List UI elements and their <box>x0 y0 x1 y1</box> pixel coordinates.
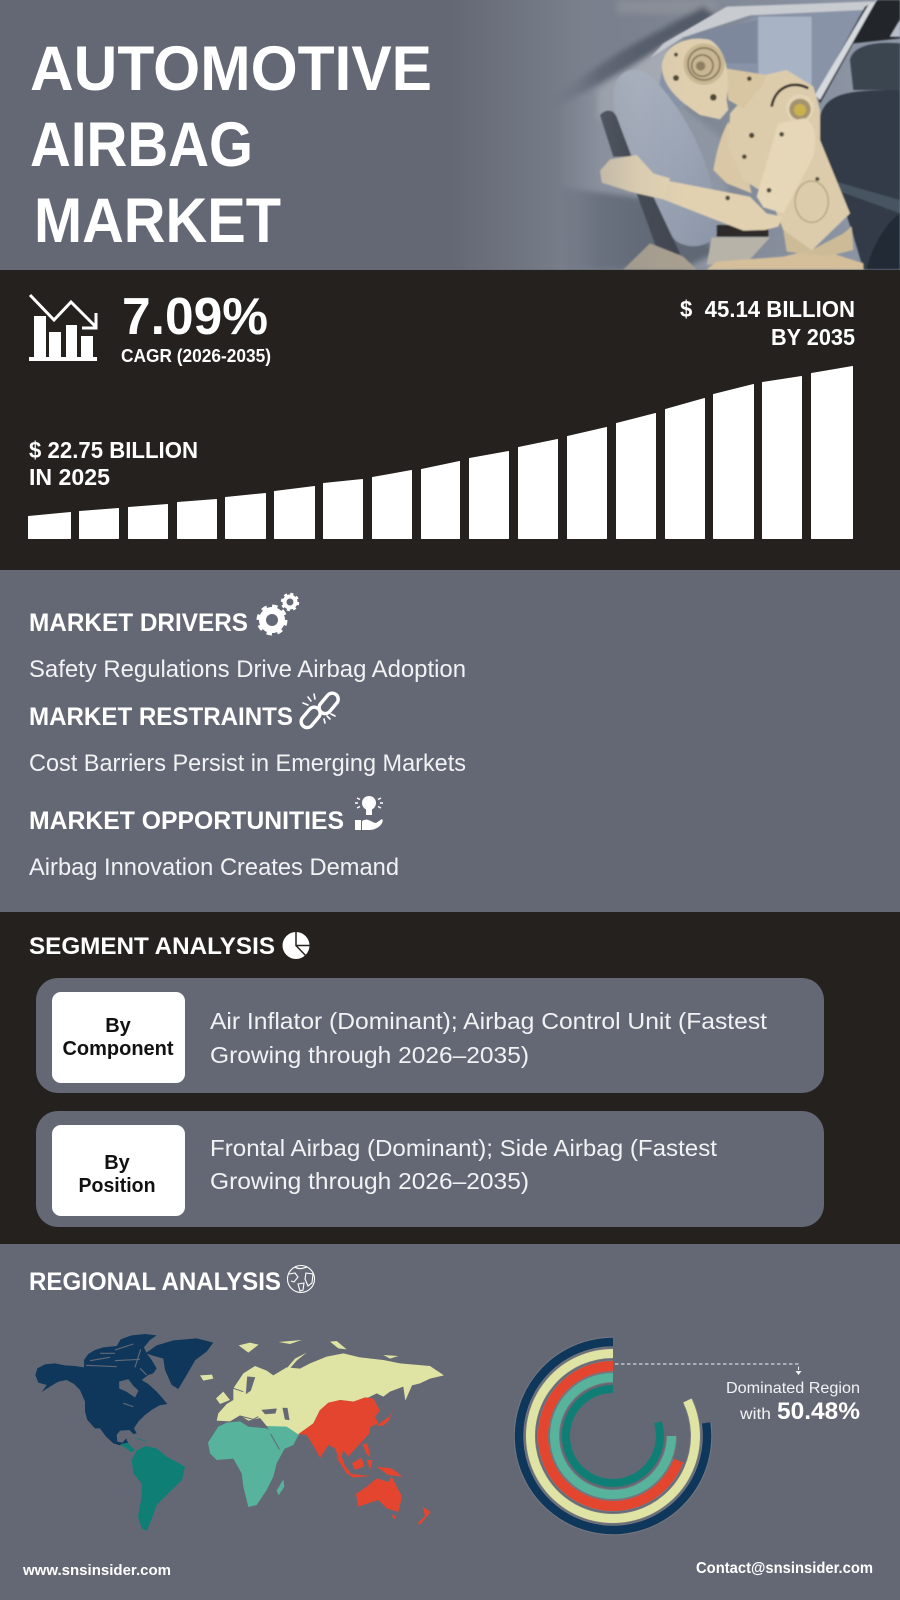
hero photo: crash test dummy and airbag <box>450 0 900 269</box>
icon: globe <box>288 1266 314 1292</box>
2035 market value: BY 2035 <box>771 324 855 350</box>
label box: Component <box>62 1038 174 1060</box>
card text: Air Inflator (Dominant); Airbag Control Unit (Fastest <box>210 1008 768 1034</box>
bar chart: market growth <box>28 366 852 538</box>
card: by component <box>36 978 824 1093</box>
arrow: dashed connector to callout <box>615 1364 802 1375</box>
map region: africa and middle east <box>208 1421 299 1507</box>
heading: market drivers: MARKET DRIVERS <box>29 609 248 637</box>
footer: website: www.snsinsider.com <box>22 1562 171 1579</box>
2025 market value: $ 22.75 BILLION <box>29 437 198 463</box>
title: AUTOMOTIVE <box>30 34 432 104</box>
footer: contact: Contact@snsinsider.com <box>696 1560 873 1577</box>
panel: regional analysis <box>0 1244 900 1600</box>
card: by position <box>36 1111 824 1227</box>
icon: bulb in hand <box>355 796 383 830</box>
callout: dominated region: 50.48% <box>777 1398 860 1425</box>
label box: By <box>104 1152 131 1174</box>
2035 market value <box>680 296 855 350</box>
callout: dominated region: Dominated Region <box>726 1380 860 1397</box>
heading: regional analysis: REGIONAL ANALYSIS <box>29 1268 281 1296</box>
heading: market opportunities: MARKET OPPORTUNITIES <box>29 807 344 835</box>
CAGR value: 7.09% <box>122 288 268 346</box>
heading: market restraints: MARKET RESTRAINTS <box>29 703 293 731</box>
card text: Growing through 2026–2035) <box>210 1168 529 1194</box>
label box: By <box>105 1015 132 1037</box>
world map <box>35 1334 444 1531</box>
header band <box>0 0 900 270</box>
map detail: hudson bay and arctic channels <box>86 1344 147 1407</box>
title: MARKET <box>34 186 281 256</box>
map region: south america <box>120 1437 185 1531</box>
2025 market value: IN 2025 <box>29 464 110 490</box>
card text: Frontal Airbag (Dominant); Side Airbag (Fastest <box>210 1135 718 1161</box>
map detail: inland seas <box>233 1377 289 1449</box>
panel: segment analysis <box>0 912 900 1244</box>
card text <box>210 1008 768 1068</box>
icon: gears <box>258 594 298 634</box>
map region: asia pacific <box>298 1397 431 1524</box>
CAGR label: CAGR (2026-2035) <box>121 346 271 366</box>
icon: broken link <box>299 691 341 730</box>
2035 market value: $ 45.14 BILLION <box>680 296 855 322</box>
label box <box>52 992 185 1083</box>
card text: Growing through 2026–2035) <box>210 1042 529 1068</box>
text: opportunity: Airbag Innovation Creates Demand <box>29 854 399 881</box>
text: driver: Safety Regulations Drive Airbag Adoption <box>29 656 466 683</box>
map region: north america <box>35 1334 213 1445</box>
label box: Position <box>78 1175 156 1197</box>
heading: segment analysis: SEGMENT ANALYSIS <box>29 933 275 960</box>
2025 market value <box>29 437 198 490</box>
icon: declining chart <box>29 295 97 361</box>
title: AIRBAG <box>30 110 253 180</box>
map region: europe and russia <box>200 1340 444 1435</box>
callout: dominated region: with <box>739 1406 771 1423</box>
title <box>30 34 432 256</box>
label box <box>52 1125 185 1216</box>
text: restraint: Cost Barriers Persist in Emerging Markets <box>29 750 466 777</box>
icon: pie chart <box>282 932 310 959</box>
card text <box>210 1135 718 1194</box>
callout: dominated region <box>726 1380 860 1425</box>
panel: market dynamics <box>0 570 900 912</box>
panel: market size <box>0 270 900 570</box>
radial chart <box>519 1342 707 1530</box>
